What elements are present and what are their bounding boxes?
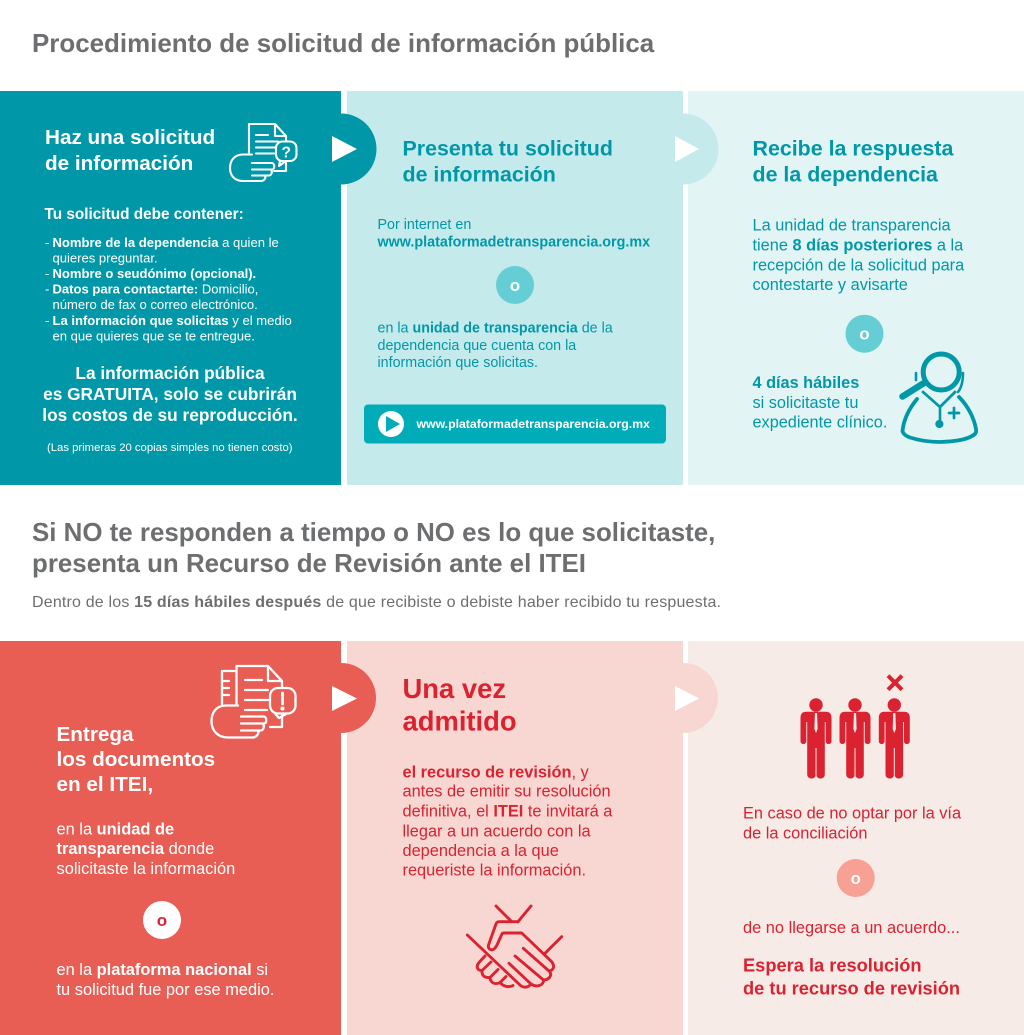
text: recurso de revision: requeriste la información.: [402, 862, 586, 880]
list: requisitos: La información que solicitas y el medio: [52, 313, 292, 328]
heading: entrega: los documentos: [56, 748, 215, 771]
icon: document with question: [230, 124, 296, 181]
heading: una vez admitido: Una vez: [402, 673, 506, 704]
text: 8 dias: contestarte y avisarte: [752, 276, 908, 294]
badge: o: [143, 901, 181, 939]
text: 8 dias: La unidad de transparencia: [752, 217, 951, 235]
text: 15 dias habiles: Dentro de los 15 días hábiles después de que recibiste o debiste haber recibido tu respuesta.: [32, 594, 721, 611]
text: 8 dias: recepción de la solicitud para: [752, 256, 965, 274]
text: unidad de transparencia: en la unidad de: [56, 820, 174, 838]
icon: handshake: [467, 906, 562, 987]
text: unidad de transparencia: en la unidad de transparencia de la: [378, 321, 613, 337]
note: copias: (Las primeras 20 copias simples no tienen costo): [47, 442, 293, 454]
text: 8 dias: [752, 217, 965, 294]
text: conciliacion: En caso de no optar por la vía: [743, 804, 962, 822]
heading: una vez admitido: admitido: [402, 706, 517, 737]
panel: entrega los documentos: [0, 641, 341, 1035]
text: 4 dias: expediente clínico.: [752, 414, 887, 432]
icon: three people with cross: [800, 676, 910, 779]
list: requisitos: Datos para contactarte: Domicilio,: [52, 282, 258, 296]
heading: presenta: Presenta tu solicitud: [402, 137, 613, 161]
badge: o: o: [157, 911, 167, 930]
heading: recurso de revision: Si NO te responden a tiempo o NO es lo que solicitaste,: [32, 519, 715, 547]
text: plataforma nacional: [56, 961, 274, 999]
text: gratuita: La información pública: [75, 363, 265, 383]
text: por internet: www.plataformadetransparencia.org.mx: [376, 235, 650, 251]
button: plataforma: [364, 404, 666, 444]
badge: o: [846, 315, 884, 353]
text: recurso de revision: dependencia a la que: [402, 842, 559, 860]
text: espera la resolucion: Espera la resolución: [743, 955, 922, 976]
text: recurso de revision: [402, 763, 613, 880]
icon: doctor with magnifier: [902, 354, 976, 442]
heading: haz una solicitud: Haz una solicitud: [45, 126, 215, 149]
list: requisitos: en que quieres que se te entregue.: [52, 328, 255, 344]
text: de no llegarse: de no llegarse a un acuerdo...: [743, 919, 960, 937]
heading: entrega: [56, 723, 215, 796]
list: requisitos: quieres preguntar.: [52, 250, 158, 266]
button: plataforma: www.plataformadetransparencia.org.mx: [416, 417, 650, 431]
panel: una vez admitido: [347, 641, 683, 1035]
heading: presenta: [402, 137, 613, 187]
text: tu solicitud debe contener: Tu solicitud debe contener:: [44, 206, 244, 223]
list: requisitos: -: [45, 313, 49, 328]
badge: o: o: [510, 276, 520, 295]
badge: o: o: [851, 869, 861, 888]
arrow: step 2 to 3: [675, 114, 718, 184]
panel: espera la resolucion: [688, 641, 1024, 1035]
heading: recurso de revision: [32, 519, 715, 578]
panel: presenta tu solicitud: [347, 91, 683, 485]
icon: document with question: ?: [281, 144, 291, 162]
text: por internet: Por internet en: [378, 217, 471, 233]
text: recurso de revision: el recurso de revisión, y: [402, 763, 590, 781]
text: unidad de transparencia: solicitaste la información: [56, 860, 235, 878]
heading: entrega: en el ITEI,: [56, 773, 153, 796]
text: 4 dias: 4 días hábiles: [752, 374, 859, 392]
list: requisitos: Nombre de la dependencia a quien le: [52, 235, 279, 250]
heading: presenta: de información: [402, 163, 556, 187]
list: requisitos: -: [45, 235, 49, 250]
text: plataforma nacional: en la plataforma nacional si: [56, 961, 268, 979]
text: 4 dias: [752, 374, 887, 432]
heading: recibe: de la dependencia: [752, 163, 939, 187]
badge: o: [496, 266, 534, 304]
badge: o: o: [859, 325, 870, 344]
text: recurso de revision: antes de emitir su resolución: [402, 783, 611, 801]
text: recurso de revision: llegar a un acuerdo con la: [402, 822, 591, 840]
heading: recibe: Recibe la respuesta: [752, 137, 955, 161]
text: conciliacion: de la conciliación: [743, 824, 867, 842]
text: 4 dias: si solicitaste tu: [752, 394, 858, 412]
text: unidad de transparencia: información que solicitas.: [378, 355, 538, 371]
heading: recibe: [752, 137, 955, 187]
text: unidad de transparencia: [378, 321, 613, 371]
text: gratuita: [42, 363, 298, 425]
text: gratuita: los costos de su reproducción.: [42, 405, 298, 425]
icon: documents with alert: [212, 666, 296, 738]
arrow: step 1 to 2: [332, 114, 376, 184]
heading: haz una solicitud: [45, 126, 215, 175]
heading: recurso de revision: presenta un Recurso de Revisión ante el ITEI: [32, 550, 586, 578]
title: Procedimiento de solicitud de información pública: [32, 30, 655, 58]
text: gratuita: es GRATUITA, solo se cubrirán: [43, 384, 297, 404]
heading: una vez admitido: [402, 673, 517, 737]
list: requisitos: número de fax o correo electrónico.: [52, 297, 258, 312]
text: unidad de transparencia: dependencia que cuenta con la: [378, 338, 576, 354]
panel: recibe la respuesta: [688, 91, 1024, 485]
text: espera la resolucion: de tu recurso de revisión: [743, 977, 960, 998]
heading: haz una solicitud: de información: [45, 152, 193, 175]
list: requisitos: [45, 235, 292, 344]
arrow: step 5 to 6: [675, 663, 718, 733]
text: unidad de transparencia: transparencia donde: [56, 840, 214, 858]
text: unidad de transparencia: [56, 820, 235, 878]
list: requisitos: -: [45, 266, 49, 281]
text: 8 dias: tiene 8 días posteriores a la: [752, 236, 964, 254]
text: espera la resolucion: [743, 955, 960, 998]
list: requisitos: Nombre o seudónimo (opcional).: [52, 266, 256, 281]
list: requisitos: -: [45, 282, 49, 296]
badge: o: [837, 859, 875, 897]
heading: entrega: Entrega: [56, 723, 134, 746]
text: recurso de revision: definitiva, el ITEI te invitará a: [402, 803, 613, 821]
text: por internet: [376, 217, 650, 251]
panel: haz una solicitud: [0, 91, 341, 485]
arrow: step 4 to 5: [332, 663, 376, 733]
text: conciliacion: [743, 804, 962, 842]
text: plataforma nacional: tu solicitud fue por ese medio.: [56, 981, 274, 999]
